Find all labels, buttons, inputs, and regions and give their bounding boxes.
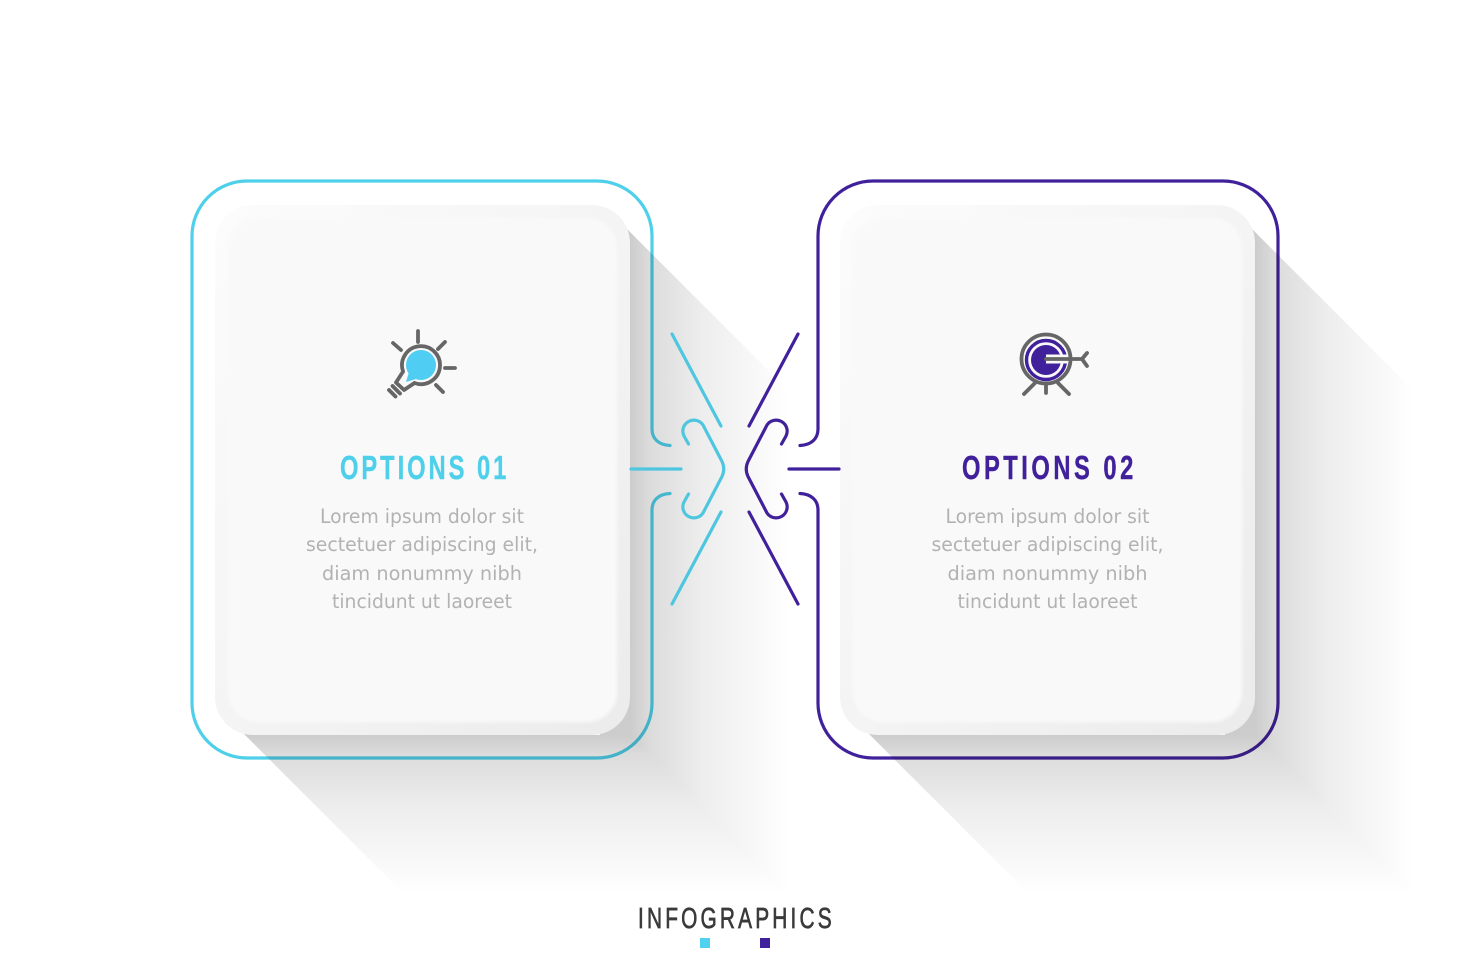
text block: options 02: diam nonummy nibh xyxy=(948,562,1148,585)
text block: options 02: Lorem ipsum dolor sit xyxy=(946,505,1150,528)
legend square: cyan xyxy=(700,938,710,948)
arrow: options 01 connector xyxy=(631,334,724,604)
text block: options 01: tincidunt ut laoreet xyxy=(332,590,512,613)
text block: options 01: diam nonummy nibh xyxy=(322,562,522,585)
panel: options 01 xyxy=(192,181,820,928)
arrow: options 02 connector xyxy=(746,334,839,604)
icon: target with arrow xyxy=(1022,334,1087,394)
outline: options 01 xyxy=(192,181,670,758)
heading: options 02: OPTIONS 02 xyxy=(962,450,1133,487)
icon: light bulb xyxy=(389,331,455,396)
heading: options 01: OPTIONS 01 xyxy=(340,450,506,487)
text block: options 01: sectetuer adipiscing elit, xyxy=(306,533,538,556)
long shadow: options 02 xyxy=(863,222,1445,928)
footer title: INFOGRAPHICS xyxy=(638,903,832,935)
legend square: purple xyxy=(760,938,770,948)
text block: options 02 xyxy=(932,505,1164,613)
text block: options 02: tincidunt ut laoreet xyxy=(958,590,1138,613)
text block: options 01 xyxy=(306,505,538,613)
panel: options 02 xyxy=(746,181,1445,928)
text block: options 01: Lorem ipsum dolor sit xyxy=(320,505,524,528)
card: options 01 xyxy=(215,205,630,735)
card: options 02 xyxy=(840,205,1255,735)
text block: options 02: sectetuer adipiscing elit, xyxy=(932,533,1164,556)
long shadow: options 01 xyxy=(238,222,820,928)
outline: options 02 xyxy=(800,181,1278,758)
